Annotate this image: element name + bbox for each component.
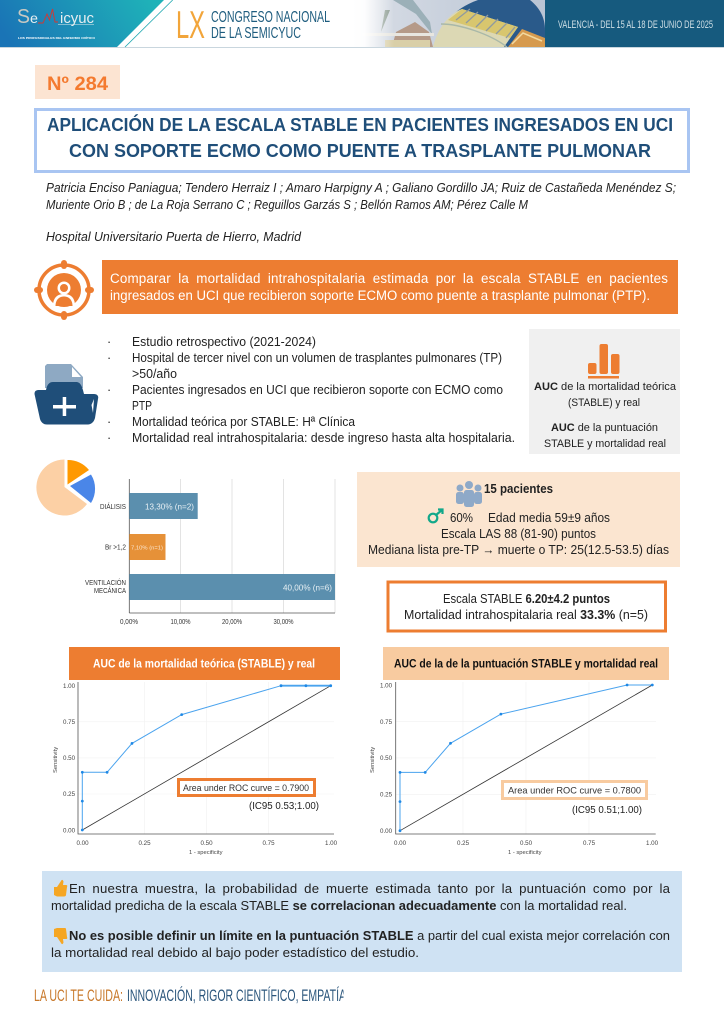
congress title: DE LA SEMICYUC xyxy=(211,25,301,42)
panel: AUC summary: AUC de la mortalidad teórica xyxy=(534,381,677,393)
chart: ROC curve right: 0.00 xyxy=(394,840,407,847)
heading: ROC right xyxy=(383,647,669,680)
header logo: Semicyuc: LOS PROFESIONALES DEL ENFERMO CRÍTICO xyxy=(18,35,96,40)
bar: dialisis: 13,30% (n=2) xyxy=(145,502,194,512)
panel: conclusions: la mortalidad real debido al bajo poder estadístico del estudio. xyxy=(51,945,419,960)
icon: male symbol xyxy=(429,510,442,522)
methods bullet list: Hospital de tercer nivel con un volumen de trasplantes pulmonares (TP) xyxy=(132,351,502,365)
chart: ROC curve left xyxy=(53,682,338,856)
header photo: Valencia building xyxy=(352,0,545,47)
methods bullet list: · xyxy=(107,415,111,429)
panel: AUC summary xyxy=(529,329,680,454)
header logo: Semicyuc: e xyxy=(30,10,38,26)
methods bullet list xyxy=(107,335,515,445)
panel: patients xyxy=(357,472,680,567)
panel: conclusions: mortalidad predicha de la escala STABLE se correlacionan adecuadamente con la mortalidad real. xyxy=(51,898,627,913)
hospital: Hospital Universitario Puerta de Hierro, Madrid xyxy=(46,230,302,244)
chart: ROC curve left: (IC95 0.53;1.00) xyxy=(249,801,319,812)
bar: ventilacion mecanica: VENTILACIÓN xyxy=(85,578,126,587)
icon: medical folder xyxy=(34,364,98,424)
number badge xyxy=(35,65,120,99)
panel: patients: 60% xyxy=(450,511,473,525)
chart: ROC curve right: 0.25 xyxy=(457,840,470,847)
panel: AUC summary: (STABLE) y real xyxy=(568,397,640,409)
objective panel xyxy=(102,260,678,314)
methods bullet list: · xyxy=(107,383,111,397)
callout: area under curve right xyxy=(502,782,646,798)
footer slogan xyxy=(34,986,346,1005)
congress title: LX xyxy=(176,4,205,47)
header banner xyxy=(0,0,724,48)
chart: ROC curve left: 0.25 xyxy=(138,840,151,847)
chart: ROC curve left: 0.75 xyxy=(262,840,275,847)
chart: ROC curve right: Sensitivity xyxy=(370,747,376,773)
chart: ROC curve right: (IC95 0.51;1.00) xyxy=(572,805,642,816)
panel: conclusions: No es posible definir un límite en la puntuación STABLE a partir del cual exista mejor correlación con xyxy=(69,928,670,943)
chart: ROC curve right: 0.25 xyxy=(380,792,393,798)
header logo: Semicyuc xyxy=(0,0,173,47)
chart: ROC curve right: 0.50 xyxy=(520,840,533,847)
icon: target person xyxy=(34,260,94,320)
date band xyxy=(545,0,724,47)
heading: ROC left xyxy=(69,647,340,680)
header logo: Semicyuc: icyuc xyxy=(60,11,94,27)
methods bullet list: Estudio retrospectivo (2021-2024) xyxy=(132,335,316,349)
panel: AUC summary: STABLE y mortalidad real xyxy=(544,438,666,450)
x axis labels: 20,00% xyxy=(222,617,242,626)
bar: bilirrubina: Br >1,2 xyxy=(105,542,126,552)
methods bullet list: Mortalidad teórica por STABLE: Hª Clínica xyxy=(132,415,355,429)
icon: thumbs up xyxy=(54,880,67,896)
chart: ROC curve left: 1 - specificity xyxy=(189,850,223,856)
methods bullet list: · xyxy=(107,431,111,445)
congress title: CONGRESO NACIONAL xyxy=(211,9,330,26)
chart: ROC curve right xyxy=(370,682,659,856)
chart: ROC curve left: 0.00 xyxy=(63,827,76,834)
heading: ROC right: AUC de la de la puntuación STABLE y mortalidad real xyxy=(394,658,658,670)
chart: ROC curve right: 1 - specificity xyxy=(508,850,542,856)
callout: area under curve left: Area under ROC curve = 0.7900 xyxy=(183,783,309,793)
authors: Muriente Orio B ; de La Roja Serrano C ; Reguillos Garzás S ; Bellón Ramos AM; Pérez Calle M xyxy=(46,198,529,212)
icon: thumbs down xyxy=(54,928,67,944)
number badge: Nº 284 xyxy=(47,74,108,95)
chart: ROC curve right: 0.75 xyxy=(380,719,393,726)
bar: ventilacion mecanica: MECÁNICA xyxy=(94,586,127,595)
chart: ROC curve left: Sensitivity xyxy=(53,747,59,773)
chart: ROC curve right: 0.75 xyxy=(583,840,596,847)
chart: ROC curve right: 0.00 xyxy=(380,828,393,835)
panel: patients: Mediana lista pre-TP → muerte o TP: 25(12.5-53.5) días xyxy=(368,543,669,557)
icon: bar chart xyxy=(588,344,620,378)
bar: dialisis: DIÁLISIS xyxy=(100,502,126,511)
bar chart: risk factors xyxy=(85,479,335,626)
panel: patients: 15 pacientes xyxy=(484,482,553,496)
icon: people xyxy=(456,481,482,507)
authors xyxy=(46,181,676,212)
x axis labels xyxy=(120,617,294,626)
methods bullet list: Mortalidad real intrahospitalaria: desde ingreso hasta alta hospitalaria. xyxy=(132,431,515,445)
methods bullet list: Pacientes ingresados en UCI que recibieron soporte con ECMO como xyxy=(132,383,503,397)
panel: conclusions: En nuestra muestra, la probabilidad de muerte estimada tanto por la puntuación como por la xyxy=(69,881,671,896)
callout: STABLE score: Escala STABLE 6.20±4.2 puntos xyxy=(443,592,610,606)
chart: ROC curve right: 1.00 xyxy=(380,682,393,690)
chart: ROC curve right: 1.00 xyxy=(646,840,659,847)
objective panel: ingresados en UCI que recibieron soporte ECMO como puente a trasplante pulmonar (PTP). xyxy=(110,288,650,303)
chart: ROC curve left: 0.25 xyxy=(63,791,76,798)
x axis labels: 30,00% xyxy=(274,617,294,626)
callout: STABLE score: Mortalidad intrahospitalaria real 33.3% (n=5) xyxy=(404,608,648,622)
chart: ROC curve right: 0.50 xyxy=(380,755,393,762)
footer slogan: INNOVACIÓN, RIGOR CIENTÍFICO, EMPATÍA xyxy=(127,986,346,1005)
methods bullet list: >50/año xyxy=(132,367,177,381)
heading: ROC left: AUC de la mortalidad teórica (STABLE) y real xyxy=(93,658,315,670)
objective panel: Comparar la mortalidad intrahospitalaria estimada por la escala STABLE en pacientes xyxy=(110,271,668,286)
chart: ROC curve left: 0.00 xyxy=(76,840,89,847)
bar: ventilacion mecanica xyxy=(85,574,335,600)
chart: ROC curve left: 1.00 xyxy=(325,840,338,847)
authors: Patricia Enciso Paniagua; Tendero Herraiz I ; Amaro Harpigny A ; Galiano Gordillo JA; Ruiz de Castañeda Menéndez S; xyxy=(46,181,676,195)
congress title xyxy=(176,4,330,47)
panel: AUC summary: AUC de la puntuación xyxy=(551,422,658,434)
chart: ROC curve left: 0.50 xyxy=(63,755,76,762)
methods bullet list: · xyxy=(107,335,111,349)
chart: ROC curve left: 0.75 xyxy=(63,719,76,726)
title box xyxy=(36,110,688,172)
methods bullet list: · xyxy=(107,351,111,365)
x axis labels: 0,00% xyxy=(120,617,138,626)
methods bullet list: PTP xyxy=(132,399,152,413)
header logo: Semicyuc: S xyxy=(17,6,30,28)
title box: CON SOPORTE ECMO COMO PUENTE A TRASPLANTE PULMONAR xyxy=(69,140,651,161)
panel: conclusions xyxy=(42,871,682,972)
callout: STABLE score xyxy=(388,582,666,631)
bar: bilirrubina xyxy=(105,534,166,560)
bar: ventilacion mecanica: 40,00% (n=6) xyxy=(283,584,332,592)
bar: dialisis xyxy=(100,493,198,519)
x axis labels: 10,00% xyxy=(170,617,191,626)
callout: area under curve left xyxy=(178,780,314,796)
pie chart xyxy=(36,459,95,515)
bar: bilirrubina: 7,10% (n=1) xyxy=(131,546,163,552)
chart: ROC curve left: 1.00 xyxy=(63,683,76,690)
panel: patients: Escala LAS 88 (81-90) puntos xyxy=(441,527,596,541)
title box: APLICACIÓN DE LA ESCALA STABLE EN PACIENTES INGRESADOS EN UCI xyxy=(47,114,673,135)
footer slogan: LA UCI TE CUIDA: xyxy=(34,986,123,1005)
callout: area under curve right: Area under ROC curve = 0.7800 xyxy=(508,786,641,796)
panel: patients: Edad media 59±9 años xyxy=(488,511,610,525)
chart: ROC curve left: 0.50 xyxy=(200,840,213,847)
